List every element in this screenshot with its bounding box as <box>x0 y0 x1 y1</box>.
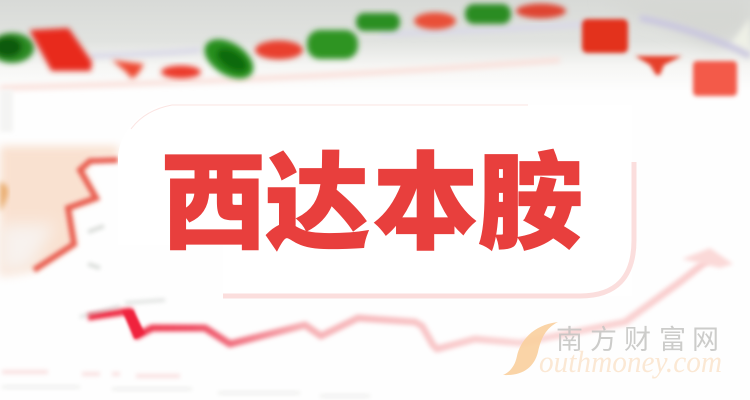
candle: green tilted <box>198 31 260 87</box>
title panel <box>118 105 634 296</box>
candle: red thin <box>516 4 566 18</box>
title: 西达本胺 <box>161 146 583 263</box>
rising red arrow line <box>88 248 733 349</box>
candlesticks <box>0 4 737 96</box>
left chart fragment <box>0 146 118 276</box>
candle: green oval <box>307 30 358 59</box>
logo domain: outhmoney.com <box>539 344 722 379</box>
candle: green left <box>0 33 34 63</box>
panel bottom-right border <box>223 162 634 296</box>
candle: red block <box>582 19 628 53</box>
watermark logo <box>503 322 722 379</box>
candle: small red <box>112 60 144 79</box>
candle: red cross <box>635 56 682 75</box>
logo swoosh <box>503 322 558 375</box>
candle: coral block <box>693 61 737 96</box>
faint chart captions <box>2 300 370 396</box>
candle: red large <box>31 29 91 70</box>
candle: red flat <box>161 66 201 78</box>
candle: green top <box>356 13 400 31</box>
logo chinese name: 南方财富网 <box>556 325 719 355</box>
candle: red oval <box>255 40 303 60</box>
arrow head <box>682 248 733 268</box>
candle: green top right <box>465 4 511 24</box>
panel top border <box>131 105 528 129</box>
candle: red top <box>414 12 456 30</box>
